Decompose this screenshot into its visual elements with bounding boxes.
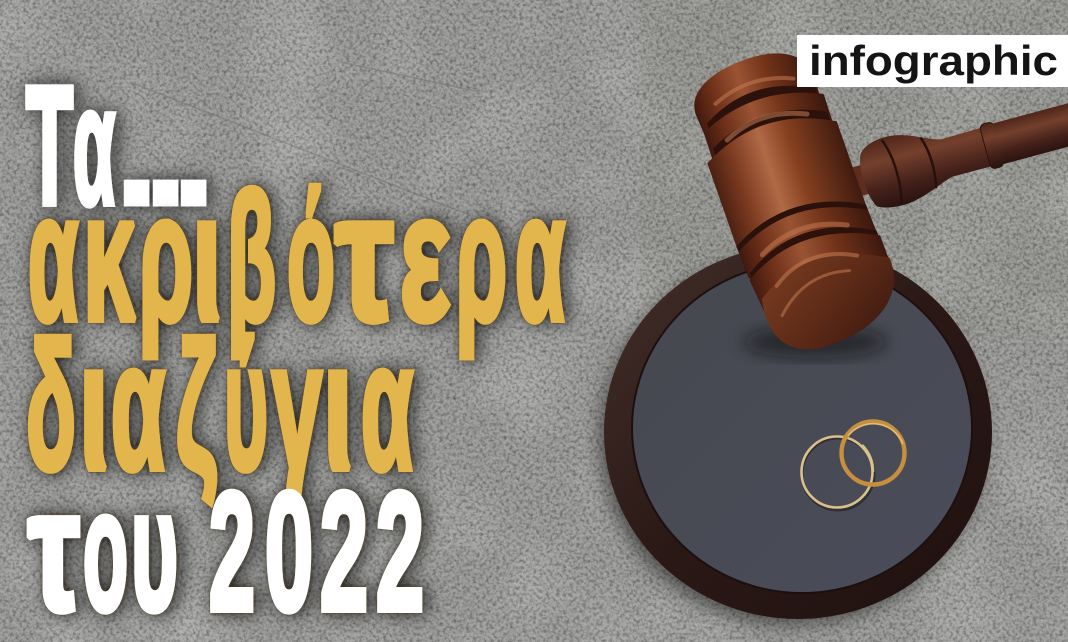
- title line: Τα...: [26, 52, 216, 240]
- head highlights: [711, 68, 868, 316]
- title line: ακριβότερα: ό: [287, 156, 335, 358]
- gavel head: [680, 36, 910, 364]
- title line: διαζύγια: ι: [323, 306, 353, 508]
- title lines lower block: α: [361, 306, 413, 508]
- title line: του: ο: [83, 454, 128, 642]
- head bands: [684, 41, 820, 135]
- gavel shadow on block: [743, 326, 887, 358]
- title line: 2022: 0: [265, 458, 313, 642]
- title line: ακριβότερα: ι: [192, 156, 222, 358]
- title line: διαζύγια: ύ: [224, 306, 268, 508]
- gavel handle: [839, 86, 1068, 217]
- label: infographic: infographic: [809, 37, 1058, 84]
- title lines lower block: υ: [131, 454, 178, 642]
- title line: Τα...: ...: [114, 60, 216, 239]
- title line: ακριβότερα: ρ: [456, 156, 507, 358]
- title: [26, 52, 565, 642]
- title line: Τα...: Τ: [26, 52, 73, 240]
- title line: ακριβότερα: κ: [83, 156, 135, 358]
- title line: διαζύγια: ζ: [176, 306, 217, 508]
- title line: ακριβότερα: ε: [400, 156, 450, 358]
- icon: wedding rings: [802, 422, 904, 510]
- title line: 2022: 2: [209, 458, 255, 642]
- title line: διαζύγια: δ: [26, 306, 76, 508]
- title line: διαζύγια: α: [111, 306, 165, 508]
- title line: 2022: 2: [376, 458, 424, 642]
- title line: 2022: 2: [320, 458, 368, 642]
- title line: ακριβότερα: τ: [335, 156, 394, 358]
- title line: διαζύγια: ι: [79, 306, 109, 508]
- text: α: [515, 156, 565, 358]
- title line: ακριβότερα: ρ: [139, 156, 193, 358]
- sound block with rings: [598, 245, 992, 626]
- title line: ακριβότερα: α: [28, 156, 78, 358]
- title line: διαζύγια: γ: [272, 306, 322, 508]
- title lines lower block: [26, 156, 565, 642]
- title line: του: τ: [28, 454, 80, 642]
- title line: Τα...: α: [73, 52, 115, 240]
- title line: ακριβότερα: β: [227, 156, 276, 358]
